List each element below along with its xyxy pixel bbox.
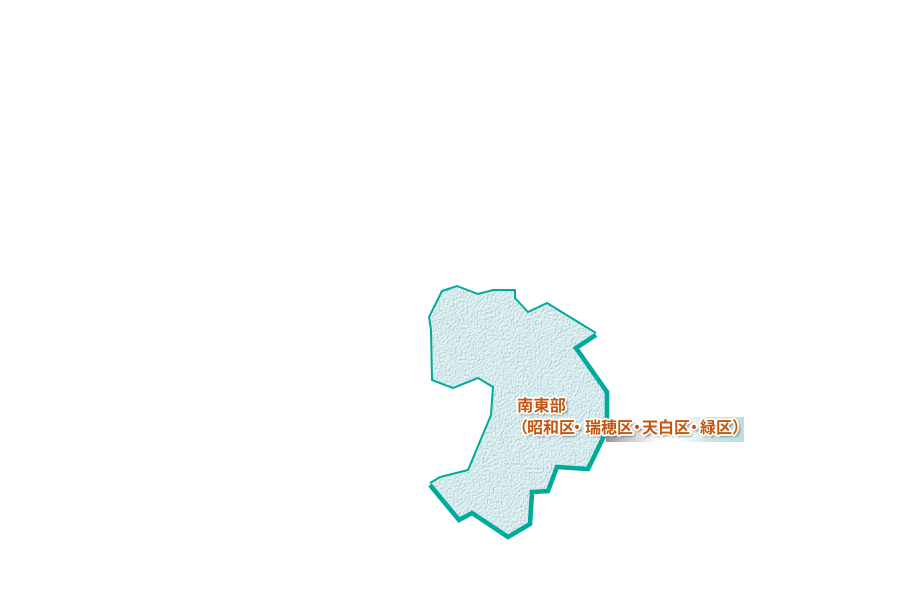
map region fill [429,286,607,537]
label: south-east district: 南東部 [517,396,566,415]
label: south-east district: （昭和区・瑞穂区・天白区・緑区） [512,418,748,437]
label: south-east district: 南東部 [517,396,566,415]
thin outline: north and west boundary [429,286,596,483]
label backing tint [680,417,744,442]
label: south-east district [512,396,750,439]
label: south-east district: （昭和区・瑞穂区・天白区・緑区） [514,420,750,439]
thick outline: south and east boundary [430,335,607,537]
label backing shadow [606,428,666,442]
label: south-east district: 南東部 [519,398,568,417]
label: south-east district: （昭和区・瑞穂区・天白区・緑区） [512,418,748,437]
